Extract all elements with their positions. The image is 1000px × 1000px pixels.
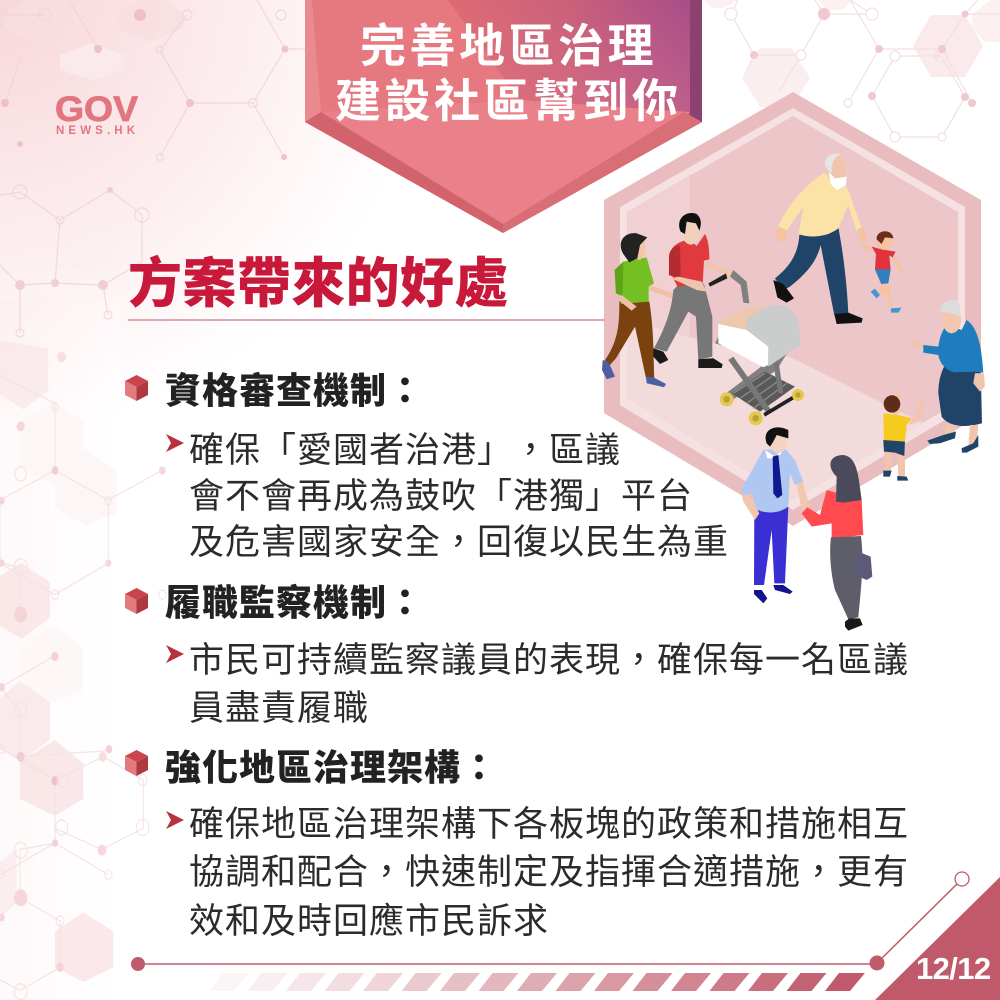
section text: governance bbox=[189, 796, 909, 944]
section text: qualification: 會不會再成為鼓吹「港獨」平台 bbox=[189, 468, 693, 519]
icon: bullet cube 2 bbox=[125, 588, 148, 614]
section text: qualification: 及危害國家安全，回復以民生為重 bbox=[189, 514, 729, 565]
corner page badge bbox=[875, 877, 1000, 1000]
people: couple with stroller bbox=[602, 213, 804, 425]
icon: GOV News logo: NEWS.HK bbox=[56, 125, 136, 137]
section text: qualification bbox=[189, 422, 729, 565]
page number: 12/12 bbox=[916, 951, 991, 986]
icon: bullet cube 1 bbox=[125, 375, 148, 401]
people: man and woman shaking hands bbox=[742, 427, 872, 631]
section text: supervision bbox=[189, 632, 909, 731]
footer stripes bbox=[209, 973, 865, 991]
people: grandmother and boy bbox=[883, 300, 985, 481]
section text: supervision: 員盡責履職 bbox=[189, 680, 369, 731]
banner ribbon bbox=[305, 0, 702, 233]
section text: supervision: 市民可持續監察議員的表現，確保每一名區議 bbox=[189, 632, 909, 683]
section heading: supervision: 履職監察機制： bbox=[165, 574, 424, 626]
heading: 方案帶來的好處 bbox=[128, 239, 509, 318]
section text: qualification: 確保「愛國者治港」，區議 bbox=[189, 422, 621, 473]
hexagon stage bbox=[604, 92, 981, 526]
title: 建設社區幫到你 bbox=[335, 65, 682, 131]
icon: arrow 3 bbox=[166, 811, 184, 829]
icon: arrow 1 bbox=[166, 434, 184, 452]
icon: arrow 2 bbox=[166, 645, 184, 663]
people: grandfather and child bbox=[773, 154, 904, 324]
section heading: qualification: 資格審查機制： bbox=[165, 362, 424, 414]
icon: GOV News logo: GOV bbox=[55, 90, 139, 129]
title: 完善地區治理 bbox=[360, 10, 657, 76]
icon: bullet cube 3 bbox=[125, 750, 148, 776]
background hexagon network top right bbox=[703, 0, 1000, 142]
heading underline bbox=[128, 319, 605, 321]
background wash bbox=[0, 0, 500, 1000]
background hexagon network left bbox=[0, 340, 166, 1000]
section text: governance: 協調和配合，快速制定及指揮合適措施，更有 bbox=[189, 844, 909, 895]
title bbox=[335, 10, 682, 131]
section heading: governance: 強化地區治理架構： bbox=[165, 739, 498, 791]
section text: governance: 確保地區治理架構下各板塊的政策和措施相互 bbox=[189, 796, 909, 847]
footer timeline bbox=[131, 872, 969, 971]
background hexagon network top left bbox=[0, 0, 305, 337]
section text: governance: 效和及時回應市民訴求 bbox=[189, 893, 549, 944]
